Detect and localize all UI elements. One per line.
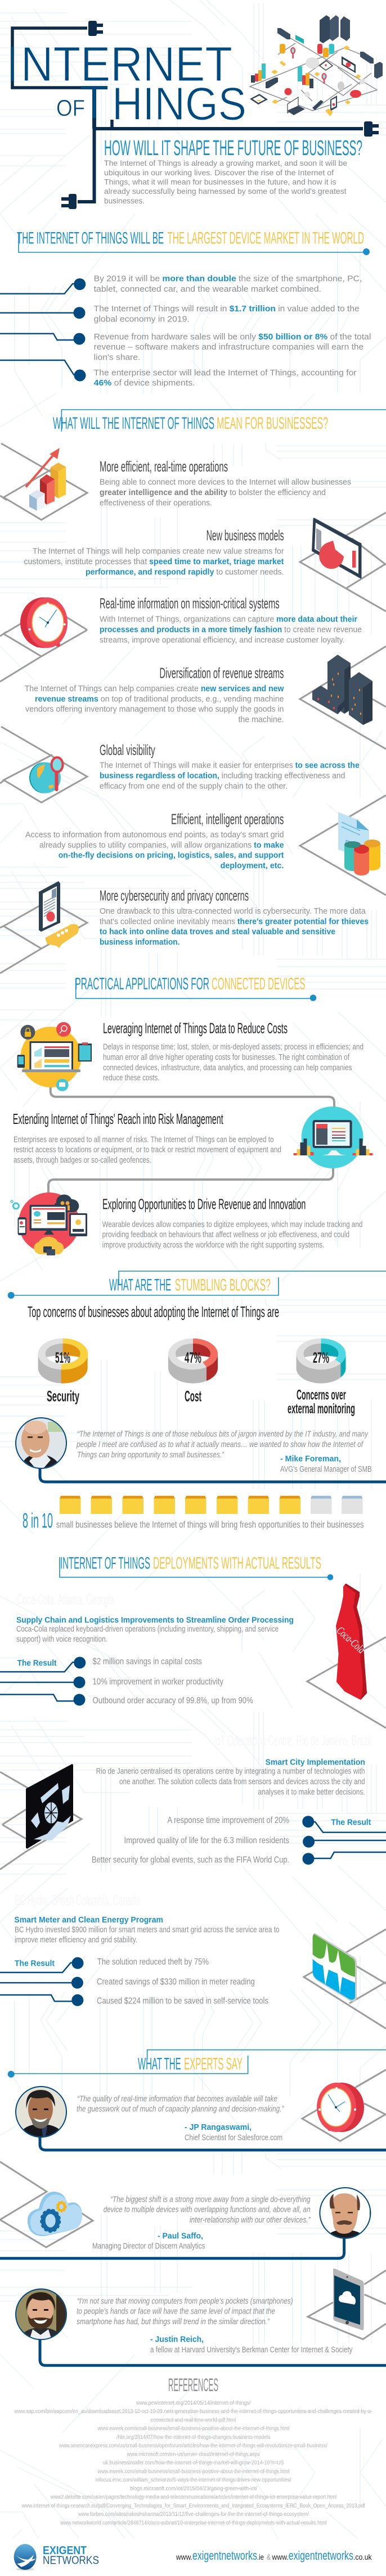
item: global visibility [0,727,360,802]
quote text: to people's hands or face will have the same level of impact that the [77,2307,275,2316]
reference list: connected-and-real-time-world-pdf.html [151,2416,236,2423]
heading: WHAT THE [138,2055,181,2074]
item text [102,1219,362,1250]
item text: already supplies to utility companies, will allow organizations to make [39,840,284,850]
results: Better security for global events, such as the FIFA World Cup. [92,1855,289,1865]
heading [75,975,316,1001]
icon: phone and speech bubble [0,881,87,973]
item heading: More cybersecurity and privacy concerns [100,887,249,904]
results: Improved quality of life for the 6.3 million residents [124,1836,289,1845]
icon: devices on red circle [11,1192,87,1255]
case text: support) with voice recognition. [16,1635,107,1644]
panel: what the experts say [0,2050,386,2365]
attribution [92,2231,205,2251]
title text: HINGS [112,78,246,130]
item text: reduce these costs. [103,1073,160,1083]
title text [21,37,246,130]
icon: laptop on yellow circle [17,1022,92,1091]
case: BC Hydro [0,1892,386,2029]
results: The Result [17,1658,57,1668]
website links: & [267,2552,271,2561]
quote text: “The quality of real-time information that becomes available will take [77,2094,277,2103]
stat: 1.7 trillion [0,304,360,324]
chart: external monitoring 27 percent [288,1339,355,1417]
case: Coca-Cola: Coca-Cola, Atlanta, Georgia [17,1591,114,1608]
item text [25,684,284,724]
reference list: www.pewinternet.org/2014/05/14/internet-of-things/ [136,2400,250,2406]
attribution: - JP Rangaswami, [185,2123,252,2132]
item: new business models [24,513,386,611]
case text [16,1624,279,1644]
panel: largest device market [0,229,371,388]
website links: www. [272,2552,289,2561]
case: Coca-Cola [0,1584,386,1728]
item text: deployment, etc. [221,861,284,870]
attribution: - Mike Foreman, [280,1454,341,1464]
quote: Paul Saffo [0,2162,371,2258]
results [0,1657,253,1706]
quote: JP Rangaswami [15,2070,386,2150]
results: Created savings of $330 million in meter reading [97,1978,255,1987]
stat: 46 percent: The enterprise sector will lead the Internet of Things, accounting for [94,368,357,378]
title text: OF [56,95,85,121]
reference list: www.americanexpress.com/us/small-business/openforum/articles/how-the-internet-of-things-will-revolutionize-small-business/ [59,2442,327,2449]
item text [100,906,369,947]
reference list: infocus.emc.com/william_schmarzo/5-ways-the-internet-of-things-drives-new-opportunities/ [96,2477,291,2483]
quote text [76,1430,369,1459]
quote text: the guesswork out of much of capacity planning and decision-making.” [77,2105,284,2114]
heading: INTERNET OF THINGS [60,1554,150,1573]
chart: cost 47 percent: Cost [185,1387,201,1404]
item: diversification of revenue streams [25,646,386,749]
attribution [280,1454,372,1474]
intro text [104,158,347,205]
item text: that's collected online inevitably means there's greater potential for thieves [100,917,369,926]
intro text: already successfully being harnessed by some of the world's greatest [104,187,347,196]
portrait: Justin Reich [15,2288,67,2340]
item text: to hack into online data troves and steal valuable and sensitive [100,927,335,937]
icon: Coca-Cola bottle [307,1584,386,1728]
heading: WHAT WILL THE INTERNET OF THINGS [53,414,214,433]
icon: globe and magnifier [0,727,87,802]
reference list [14,2400,372,2526]
logo: Exigent Networks [14,2544,99,2570]
case heading: Smart City Implementation [266,1758,365,1767]
results [92,1816,386,1865]
heading: WHAT ARE THE [109,1276,171,1295]
item text: restrict access to locations or equipment, or to track or restrict movement of equipment and [14,1145,281,1155]
quote text [77,2296,293,2326]
case: BC Hydro: BC Hydro, British Columbia, Canada [15,1892,140,1908]
chart: cost 47 percent: 47% [185,1349,201,1366]
case text: Coca-Cola replaced keyboard-driven operations (including inventory, shipping, and service [16,1624,279,1634]
heading: STUMBLING BLOCKS? [175,1276,271,1295]
item text: the machine. [239,715,284,724]
quote: Mike Foreman [15,1417,386,1482]
icon: document and coins [300,795,386,895]
item heading: Extending Internet of Things' Reach into Risk Management [13,1110,223,1127]
icon: red clock [302,2070,386,2141]
website links: exigentnetworks [289,2548,353,2563]
icon: monitor on teal circle [294,1106,372,1168]
panel: references: REFERENCES [168,2375,218,2395]
item text: assets, through badges or so-called geofences. [14,1155,151,1165]
website links: www. [176,2552,192,2561]
icon: Rio city crest [0,1764,82,1870]
stat: 50 billion [0,332,371,362]
item text [14,1135,281,1165]
item text: Being able to connect more devices to the Internet will allow businesses [100,478,351,487]
stat: 46 percent [0,360,357,388]
panel: deployments with actual results [0,1554,386,2029]
item text: The Internet of Things will help companies create new value streams for [33,547,284,556]
item heading: Global visibility [100,741,155,758]
chart: external monitoring 27 percent: 27% [313,1349,329,1366]
reference list: uk.businessinsider.com/how-the-internet-of-things-market-will-grow-2014-10?r=US [103,2460,284,2466]
item heading: New business models [207,527,284,544]
stat: 50 billion: Revenue from hardware sales will be only $50 billion or 8% of the total [94,332,371,342]
portrait: Mike Foreman [15,1417,67,1469]
item text [24,547,284,577]
panel: stumbling blocks [8,1271,386,1532]
item text: The Internet of Things can help companies create new services and new [25,684,284,693]
reference list: www.microsoft.com/en-us/server-cloud/internet-of-things.aspx [127,2451,261,2457]
stat: more than double [0,274,362,294]
item: efficient intelligent operations [25,795,386,895]
item text: customers, institute processes that speed time to market, triage market [24,557,284,566]
quote text: “I'm not sure that moving computers from people's pockets (smartphones) [77,2296,293,2306]
item text: Access to information from autonomous end points, as today's smart grid [25,830,284,840]
attribution: Chief Scientist for Salesforce.com [185,2133,282,2142]
results: $2 million savings in capital costs [92,1657,202,1667]
attribution: - Paul Saffo, [158,2231,203,2241]
logo: Exigent Networks: EXIGENT [43,2545,87,2557]
item heading: More efficient, real-time operations [100,458,228,475]
reference list: www.eweek.com/small-business/small-business-positive-about-the-internet-of-things.html [97,2468,289,2475]
reference list: www.eweek.com/small-business/small-business-positive-about-the-internet-of-things.html [97,2425,289,2432]
results: 10% improvement in worker productivity [92,1677,223,1686]
case text [15,1925,280,1945]
item text [103,1042,363,1083]
stat: 8 in 10 [23,1509,364,1532]
item text: Enterprises are exposed to all manner of risks. The Internet of Things can be employed to [14,1135,274,1144]
item text: business regardless of location, including tracking effectiveness and [100,771,345,781]
results: Caused $224 million to be saved in self-service tools [97,1997,268,2006]
results: A response time improvement of 20% [168,1816,289,1825]
item: revenue and innovation [11,1192,362,1255]
heading: EXPERTS SAY [184,2055,243,2074]
reference list: www.forbes.com/sites/rakeshsharma/2013/11/12/five-challenges-for-the-the-internet-of-things-ecosystem/ [78,2511,309,2518]
icon: BC Hydro logo [304,1929,386,2029]
logo: Exigent Networks: NETWORKS [43,2555,99,2567]
footer [14,2544,372,2570]
item text [100,761,360,791]
quote text [104,2194,311,2225]
quote text: inter-relationship with our other devices.” [190,2215,311,2225]
panel: references [14,2375,372,2526]
item text: greater intelligence and the ability to bolster the efficiency and [100,488,326,497]
pictogram: 8 in 10 folders [60,1496,362,1514]
attribution [150,2335,353,2355]
case text: BC Hydro invested $900 million for smart meters and smart grid across the service area to [15,1925,280,1934]
item text: With Internet of Things, organizations can capture more data about their [100,615,357,624]
item text: improve productivity across the workforce with the right supporting systems. [102,1240,325,1250]
attribution: - Justin Reich, [150,2335,204,2344]
stat: 1.7 trillion: The Internet of Things will result in $1.7 trillion in value added to the [94,304,360,314]
results [0,1957,268,2006]
item text: The Internet of Things will make it easier for enterprises to see across the [100,761,360,770]
case: Rio de Janeiro [0,1732,386,1870]
intro text: Things, what it will mean for businesses in the future, and how it is [104,178,336,187]
item text: processes and products in a more timely fashion to create new revenue [100,625,362,634]
item: more efficient operations [0,443,351,520]
website links: exigentnetworks [192,2548,257,2563]
connector: application steps [48,1071,334,1194]
item text [100,478,351,507]
item text: performance, and respond rapidly to customer needs. [86,567,284,577]
intro text: The Internet of Things is already a growing market, and soon it will be [104,158,347,167]
case text: improve meter efficiency and grid stability. [15,1935,137,1945]
chart: cost 47 percent [168,1339,218,1404]
icon: office buildings [300,646,386,749]
portrait: JP Rangaswami [15,2086,67,2138]
item text: streams, improve operational efficiency, and increase customer loyalty. [100,635,344,645]
panel: practical applications [11,975,372,1255]
item heading: Diversification of revenue streams [160,665,284,682]
item heading: Efficient, intelligent operations [171,811,284,828]
item text: effectiveness of their operations. [100,498,212,507]
item text: efficacy from one end of the supply chain to the other. [100,781,288,791]
stat: 50 billion: revenue – software makers and infrastructure companies will earn the [94,342,363,352]
results: The solution reduced theft by 75% [97,1957,209,1967]
stat: more than double: tablet, connected car, and the wearable market combined. [94,284,321,294]
stat: 1.7 trillion: global economy in 2019. [94,315,190,324]
item text: business information. [100,937,179,947]
reference list: www.networkworld.com/article/2848714/cisco-subnet/10-enterprise-internet-of-things-deployments-with-actual-results.html [60,2519,327,2526]
illustration: isometric connected network [250,15,383,116]
portrait: Paul Saffo [319,2187,371,2239]
item text: One drawback to this ultra-connected world is cybersecurity. The more data [100,906,366,916]
item text: vendors offering inventory management to those who supply the goods in [25,705,284,714]
panel: what IoT means for businesses [0,410,386,973]
intro text: businesses. [104,196,145,205]
quote text: “The biggest shift is a strong move away from a single do-everything [110,2194,311,2204]
icon: red clock [0,597,87,682]
chart: security 51 percent [38,1339,88,1404]
stat: 8 in 10: 8 in 10 [23,1509,53,1532]
attribution [185,2123,282,2142]
item text: revenue streams on top of traditional products, e.g., vending machine [35,694,284,704]
item text [25,830,284,870]
case heading: Supply Chain and Logistics Improvements to Streamline Order Processing [16,1615,294,1625]
chart: security 51 percent: Security [47,1387,79,1404]
quote text: smartphone has had, but things will trend in the similar direction.” [77,2317,270,2326]
case heading: Smart Meter and Clean Energy Program [14,1915,163,1925]
icon: rising bar chart [0,443,87,520]
item: real-time information [0,595,362,682]
stat: more than double: By 2019 it will be more than double the size of the smartphone, PC, [94,274,362,284]
quote: Justin Reich [15,2269,386,2365]
title cable and plugs [12,21,379,209]
icon: cloud with gears [0,2162,93,2247]
heading [8,2050,386,2078]
quote text: device to multiple devices with overlapping functions and, above all, an [104,2205,311,2215]
results: The Result [331,1817,371,1827]
heading [17,229,370,255]
website links: .ie [257,2552,264,2561]
panel: title header [12,15,383,209]
quote text: Things can bring opportunity to small businesses.” [77,1450,225,1459]
results: The Result [15,1958,55,1968]
heading [60,1554,333,1580]
attribution: Managing Director of Discern Analytics [92,2242,205,2251]
reference list: /hbr.org/2014/07/how-the-internet-of-things-changes-business-models [116,2434,270,2441]
results: Outbound order accuracy of 99.8%, up from 90% [92,1696,253,1706]
heading: THE INTERNET OF THINGS WILL BE [17,229,164,247]
item text: on-the-fly decisions on pricing, logistics, sales, and support [59,851,284,860]
intro text: ubiquitous in our working lives. Discover the rise of the Internet of [104,168,334,177]
title text: NTERNET [21,37,232,92]
reference list: blogs.microsoft.com/iot/2015/04/23/going-green-with-iot/ [130,2485,257,2492]
chart: security 51 percent: 51% [55,1349,70,1366]
heading: PRACTICAL APPLICATIONS FOR [75,975,209,994]
website links [176,2548,372,2563]
stat: 46 percent: 46% of device shipments. [94,378,195,388]
case text [96,1767,365,1797]
item: reduce costs [17,1019,363,1091]
stat: 50 billion: lion's share. [94,353,140,362]
icon: isometric tablet with pie chart [300,513,386,611]
item text [100,615,362,645]
icon: Coca-Cola bottle: Coca-Cola [334,1624,367,1656]
icon: tablet with cloud [308,2269,386,2339]
heading [8,1271,386,1299]
quote text [77,2094,284,2114]
item: cybersecurity and privacy [0,881,369,973]
website links: .co.uk [353,2552,372,2561]
item: risk management [13,1106,372,1168]
